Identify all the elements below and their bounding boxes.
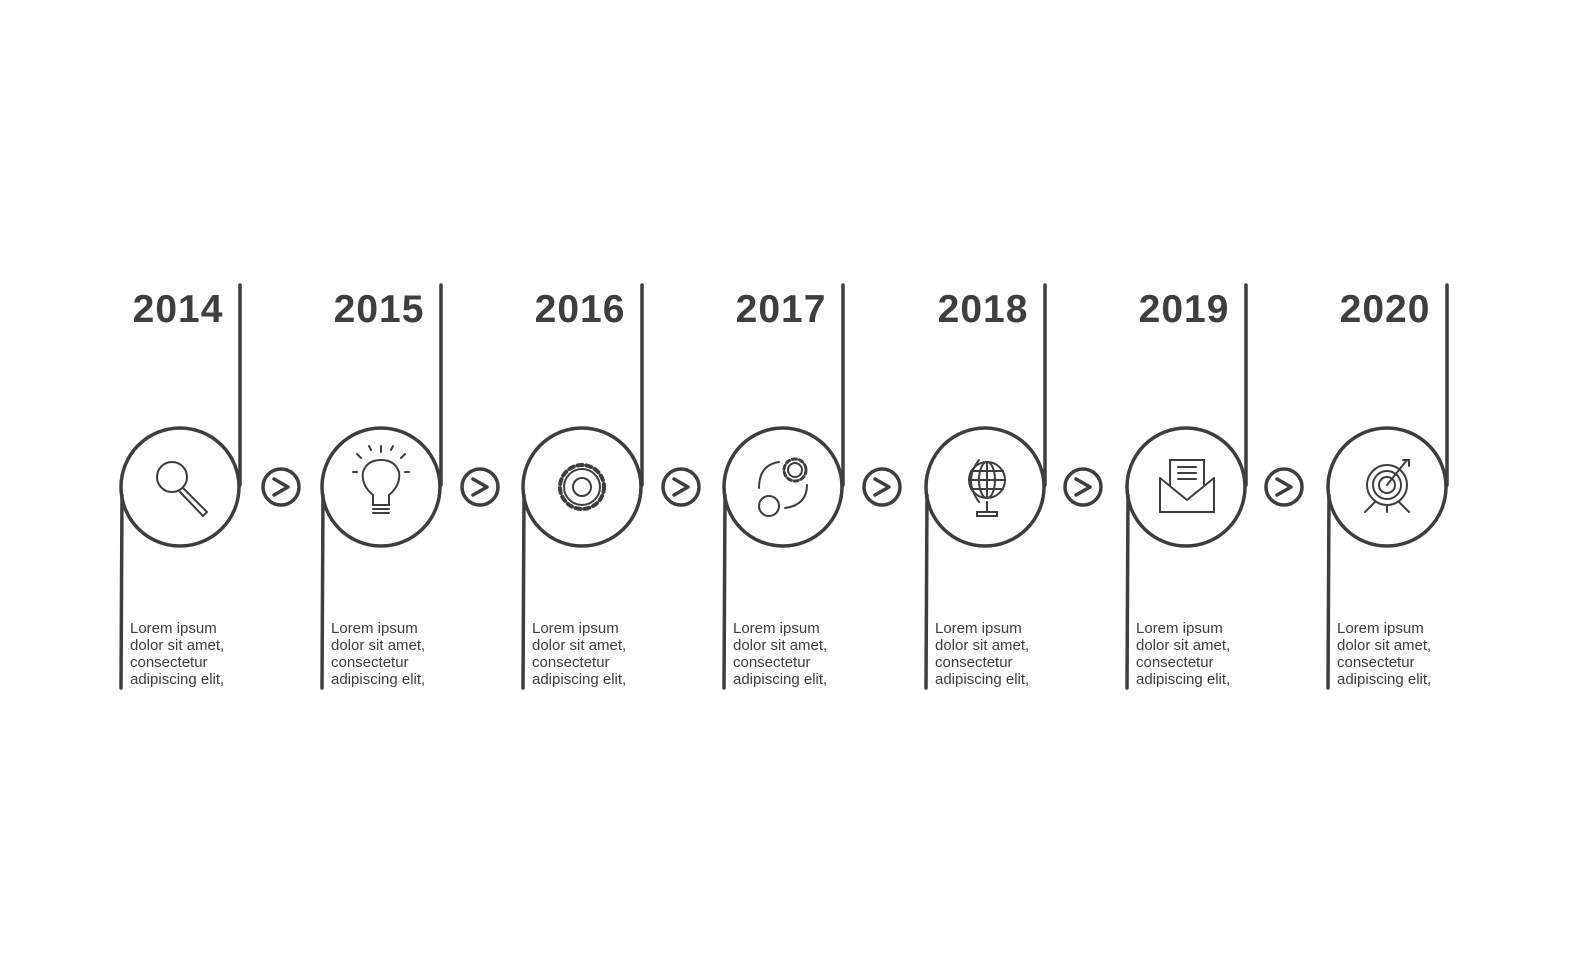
text block: consectetur (1337, 654, 1415, 671)
icon: gear (560, 465, 604, 509)
text block: adipiscing elit, (1136, 671, 1230, 688)
stage 2015 (322, 285, 441, 688)
icon: magnifier (157, 462, 207, 516)
year 2018: 2018 (938, 288, 1028, 331)
text block: Lorem ipsum (733, 620, 820, 637)
text block: Lorem ipsum (532, 620, 619, 637)
stage 2017 (724, 285, 843, 688)
icon: bulb (353, 446, 409, 513)
text block: Lorem ipsum (331, 620, 418, 637)
text block: adipiscing elit, (532, 671, 626, 688)
arrow 4 (864, 469, 900, 505)
icon: money gear cycle (759, 459, 807, 516)
text block: dolor sit amet, (130, 637, 224, 654)
text block: consectetur (733, 654, 811, 671)
year 2017: 2017 (736, 288, 826, 331)
text block: dolor sit amet, (1337, 637, 1431, 654)
text block: adipiscing elit, (733, 671, 827, 688)
text block: consectetur (331, 654, 409, 671)
stage 2018 (926, 285, 1045, 688)
icon: target (1365, 460, 1409, 512)
arrow 1 (263, 469, 299, 505)
text block: Lorem ipsum (130, 620, 217, 637)
arrow 5 (1065, 469, 1101, 505)
text block: Lorem ipsum (935, 620, 1022, 637)
text block: consectetur (532, 654, 610, 671)
text block: dolor sit amet, (1136, 637, 1230, 654)
arrow 6 (1266, 469, 1302, 505)
text block: dolor sit amet, (331, 637, 425, 654)
icon: globe (969, 460, 1005, 516)
text block: consectetur (935, 654, 1013, 671)
year 2019: 2019 (1139, 288, 1229, 331)
text block: dolor sit amet, (935, 637, 1029, 654)
arrow 3 (663, 469, 699, 505)
text block: dolor sit amet, (532, 637, 626, 654)
icon: envelope (1160, 460, 1214, 512)
text block: consectetur (1136, 654, 1214, 671)
year 2020: 2020 (1340, 288, 1430, 331)
year 2014: 2014 (133, 288, 223, 331)
text block: adipiscing elit, (1337, 671, 1431, 688)
stage 2020 (1328, 285, 1447, 688)
text block: Lorem ipsum (1337, 620, 1424, 637)
text block: adipiscing elit, (331, 671, 425, 688)
text block: dolor sit amet, (733, 637, 827, 654)
year 2015: 2015 (334, 288, 424, 331)
stage 2014 (121, 285, 240, 688)
text block: adipiscing elit, (130, 671, 224, 688)
year 2016: 2016 (535, 288, 625, 331)
text block: adipiscing elit, (935, 671, 1029, 688)
stage 2016 (523, 285, 642, 688)
text block: Lorem ipsum (1136, 620, 1223, 637)
stage 2019 (1127, 285, 1246, 688)
arrow 2 (462, 469, 498, 505)
text block: consectetur (130, 654, 208, 671)
